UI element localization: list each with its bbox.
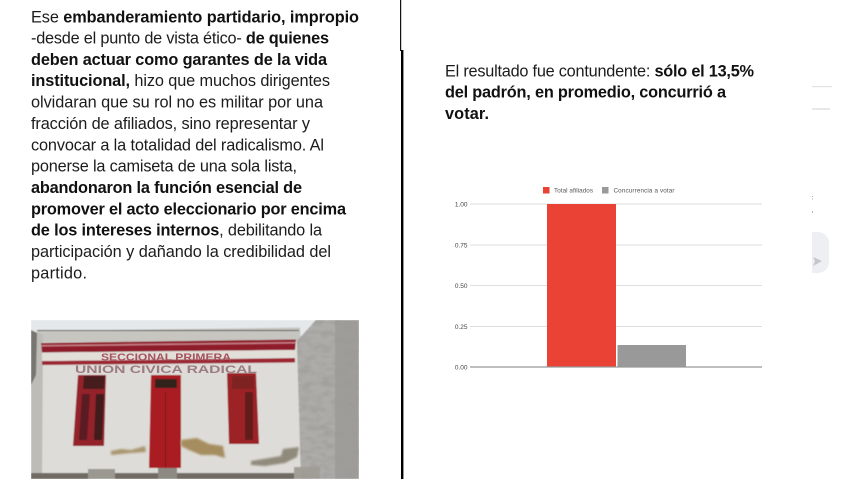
wall stains <box>111 438 299 466</box>
wall grime <box>297 320 359 479</box>
left text block: deben actuar como garantes de la vida <box>31 51 328 69</box>
legend: Concurrencia a votar <box>614 187 674 194</box>
right text block: del padrón, en promedio, concurrió a <box>445 84 727 102</box>
left text block: partido. <box>31 264 87 282</box>
center door <box>149 375 181 468</box>
right text block: El resultado fue contundente: sólo el 13,5% <box>445 62 755 80</box>
right wall <box>296 320 336 479</box>
left text block <box>31 8 359 282</box>
left text block: Ese embanderamiento partidario, impropio <box>31 8 359 26</box>
sky <box>31 320 316 336</box>
bar chart <box>455 187 762 371</box>
left text block: olvidaran que su rol no es militar por una <box>31 94 324 112</box>
sign text: SECCIONAL PRIMERA <box>101 352 231 364</box>
bar: total afiliados <box>547 204 616 367</box>
band between stripes <box>42 350 295 361</box>
bar: concurrencia a votar <box>618 345 686 367</box>
baseline <box>470 366 762 368</box>
side interface fragments <box>812 86 832 273</box>
left text block: de los intereses internos, debilitando la <box>31 222 323 240</box>
left text block: institucional, hizo que muchos dirigentes <box>31 72 330 90</box>
photo: party headquarters building <box>31 320 359 479</box>
photo: party headquarters building: UNION CIVICA RADICAL <box>75 364 257 376</box>
legend: Total afiliados <box>554 187 593 194</box>
grid lines <box>470 204 762 326</box>
left window <box>73 375 106 446</box>
left text block: fracción de afiliados, sino representar y <box>31 115 311 133</box>
left text block: promover el acto eleccionario por encima <box>31 200 347 218</box>
red stripes <box>41 340 296 352</box>
left text block: participación y dañando la credibilidad del <box>31 243 331 261</box>
vertical divider <box>400 0 403 479</box>
panel with arrow icon <box>812 232 829 273</box>
axis labels: 1.00 <box>455 201 468 208</box>
axis labels: 0.50 <box>455 283 468 290</box>
axis labels: 0.75 <box>455 242 468 249</box>
axis labels: 0.25 <box>455 324 468 331</box>
axis labels <box>455 201 468 371</box>
roof parapet <box>37 328 301 342</box>
right text block: votar. <box>445 105 489 123</box>
right text block <box>445 62 755 123</box>
left text block: -desde el punto de vista ético- de quienes <box>31 30 329 48</box>
legend <box>543 187 674 194</box>
left text block: convocar a la totalidad del radicalismo. Al <box>31 136 324 154</box>
left text block: ponerse la camiseta de una sola lista, <box>31 158 297 176</box>
left text block: abandonaron la función esencial de <box>31 179 302 197</box>
right window <box>227 373 259 444</box>
left wall edge <box>31 330 43 479</box>
axis labels: 0.00 <box>455 364 468 371</box>
front wall <box>31 340 301 479</box>
pavement <box>31 473 301 479</box>
